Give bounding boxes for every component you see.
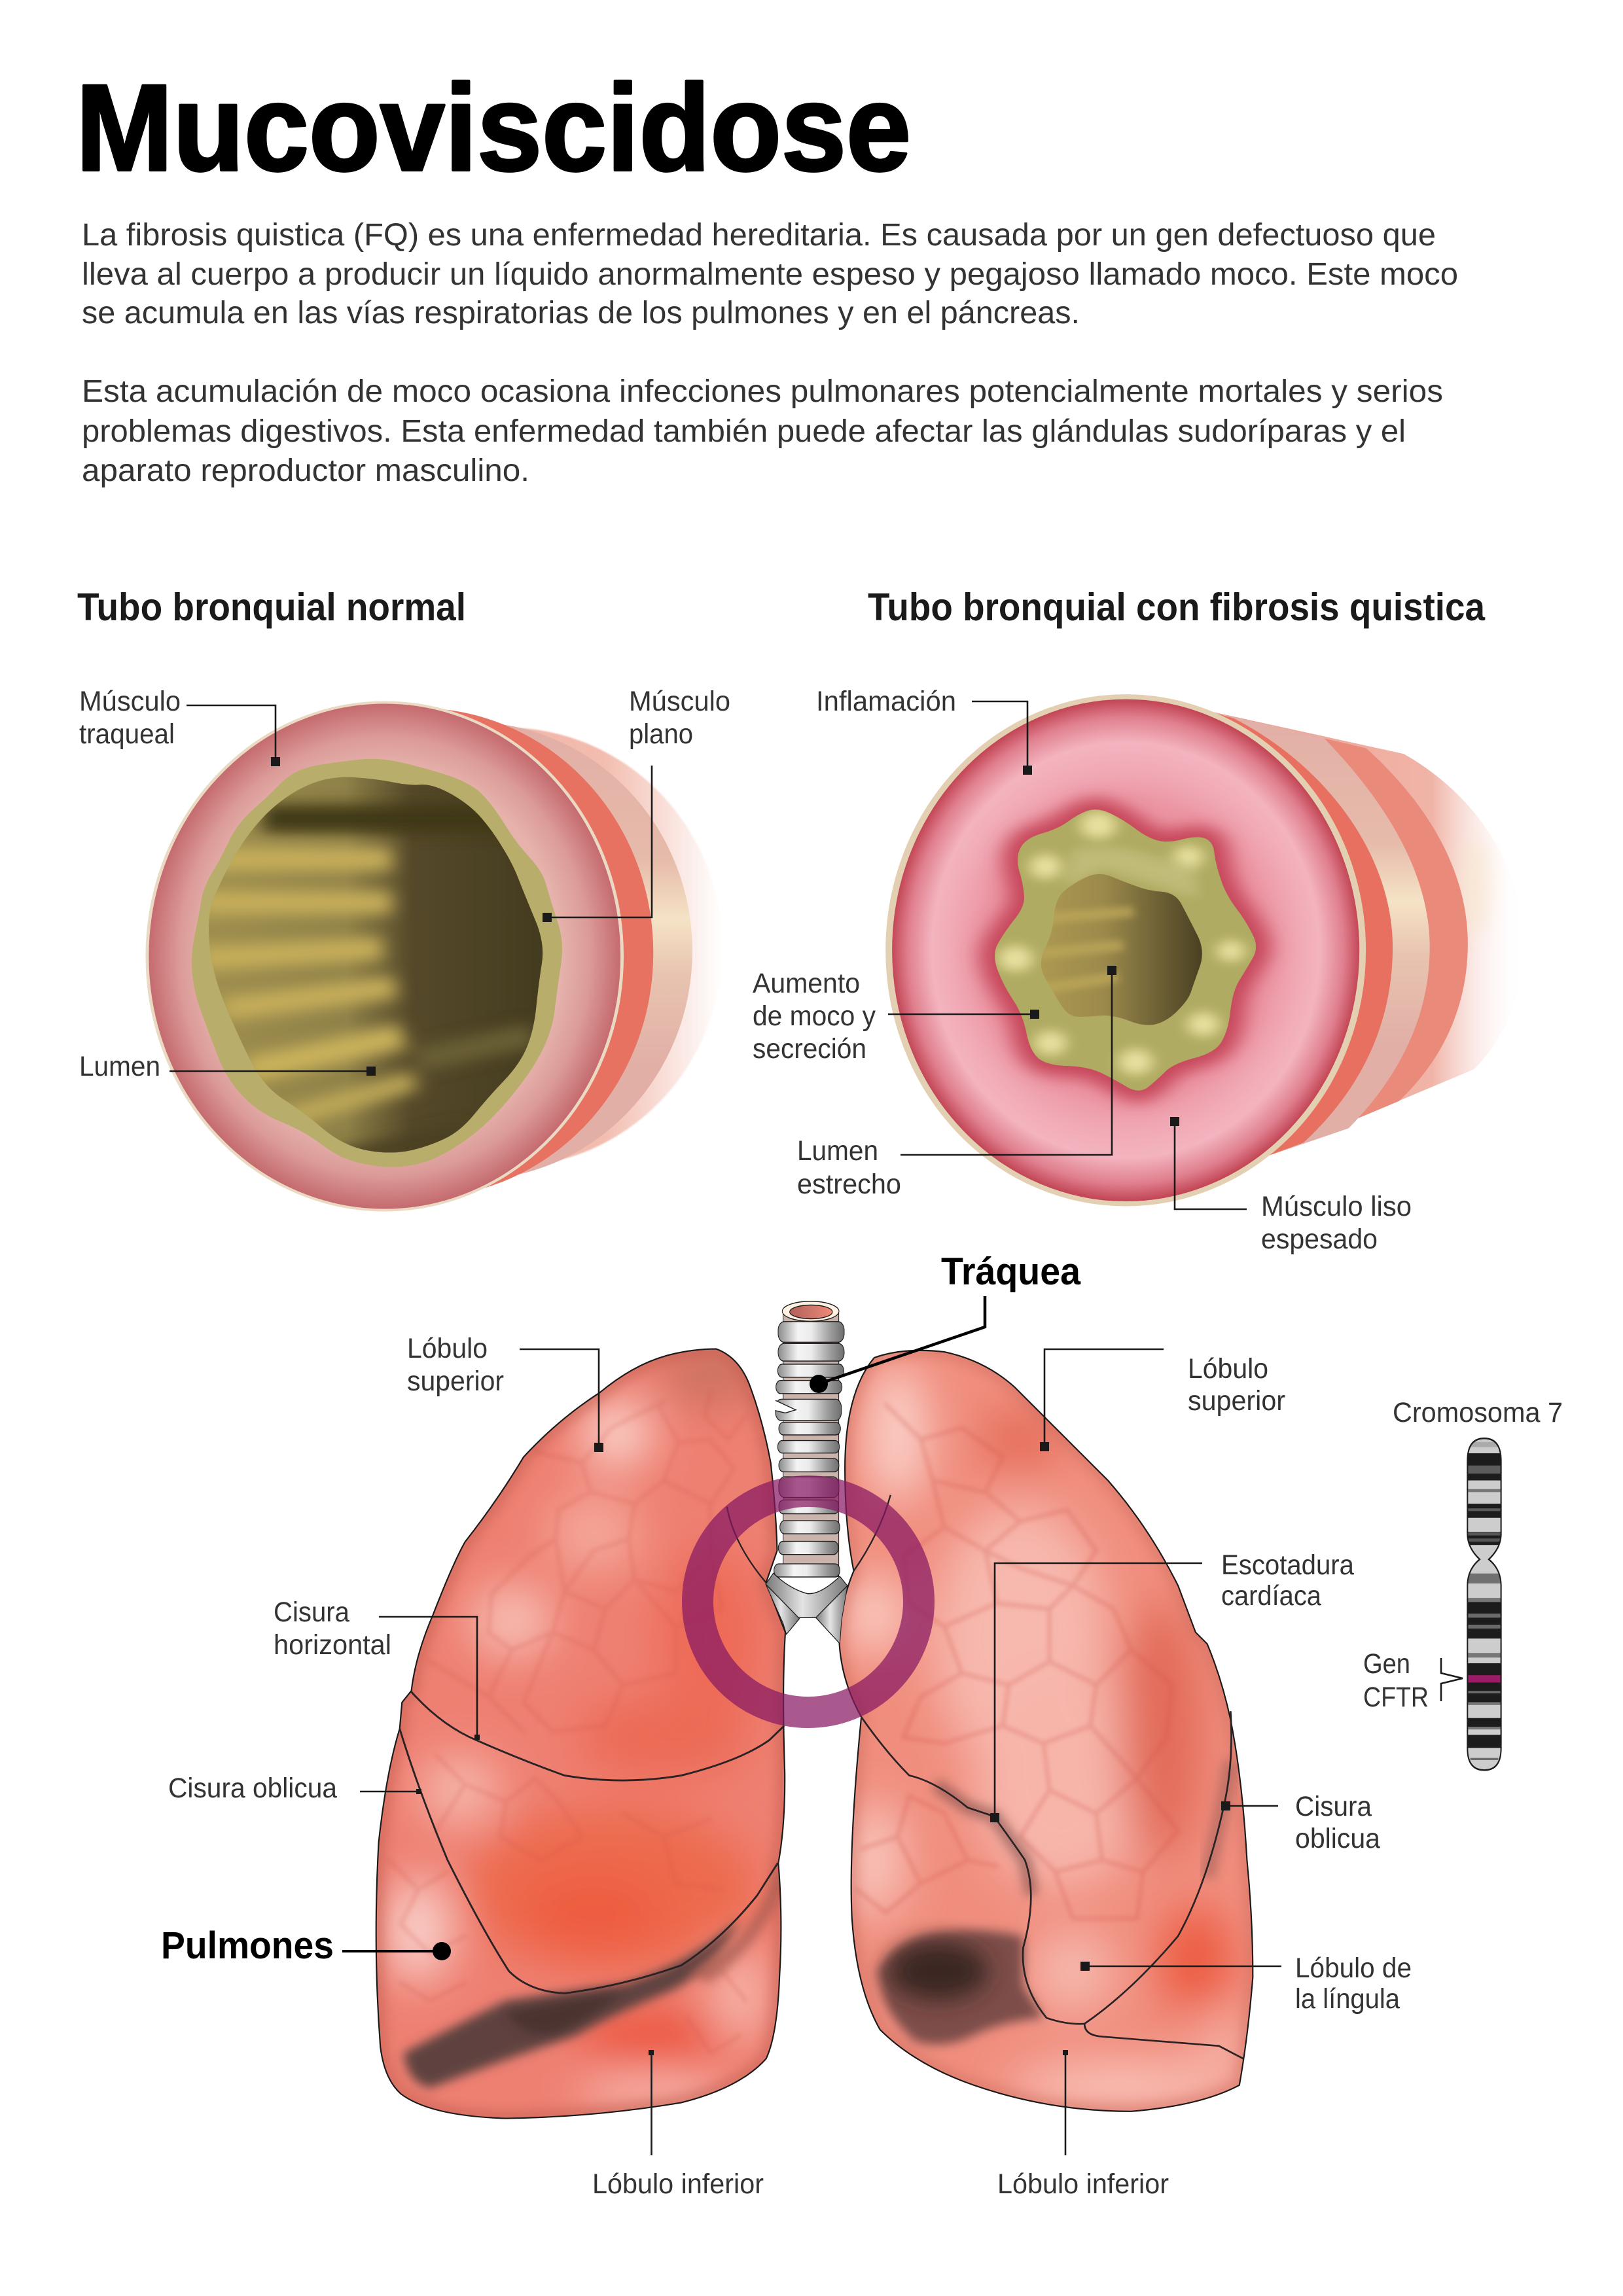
label: Escotadura cardíaca: cardíaca — [1221, 1580, 1321, 1612]
right lung — [727, 1351, 1253, 2111]
trachea illustration — [766, 1301, 847, 1644]
panel: chromosome 7 — [1363, 1397, 1563, 1773]
label: Tráquea — [810, 1250, 1081, 1393]
label: Cisura oblicua (right): oblicua — [1295, 1823, 1380, 1854]
left lung shading — [386, 1349, 766, 2108]
front face — [147, 702, 622, 1210]
label: Lóbulo de la língula: la língula — [1295, 1983, 1400, 2015]
left lung outline — [376, 1349, 785, 2119]
intro text block: problemas digestivos. Esta enfermedad también puede afectar las glándulas sudoríparas y el — [82, 414, 1406, 449]
cartilage rings — [774, 1322, 844, 1577]
tube body rings — [185, 708, 722, 1198]
label: Tráquea: Tráquea — [941, 1250, 1081, 1293]
labels: lungs — [161, 1250, 1412, 2200]
narrow lumen — [1041, 874, 1202, 1025]
right lung edge shadow — [839, 1351, 1253, 2111]
label: Músculo traqueal: traqueal — [79, 718, 175, 750]
mucus and secretion — [995, 809, 1256, 1091]
left lung vessel network — [389, 1393, 745, 2053]
mucus layer — [192, 759, 562, 1167]
label: Lóbulo inferior (left): Lóbulo inferior — [592, 2168, 764, 2200]
label: Lóbulo superior (left lung): Lóbulo — [407, 1333, 488, 1364]
label: Lóbulo inferior (left) — [592, 2050, 764, 2200]
heading: normal bronchial tube: Tubo bronquial normal — [77, 586, 466, 629]
label: Cisura oblicua (right) — [1221, 1791, 1380, 1854]
label: Aumento de moco y secreción: secreción — [753, 1033, 866, 1065]
heading: bronchial tube with cystic fibrosis: Tubo bronquial con fibrosis quistica — [868, 586, 1486, 629]
label: Músculo plano: plano — [629, 718, 693, 750]
labels: cystic fibrosis tube — [753, 686, 1412, 1255]
inflammation glow around mucus — [971, 793, 1281, 1109]
label: Lóbulo superior (right lung): superior — [1188, 1385, 1285, 1417]
intro text block: Esta acumulación de moco ocasiona infecciones pulmonares potencialmente mortales y serios — [82, 374, 1443, 409]
label: Músculo liso espesado — [1170, 1117, 1412, 1255]
label: Lóbulo superior (left lung) — [407, 1333, 603, 1452]
labels: normal tube — [79, 686, 730, 1082]
left lung — [376, 1349, 787, 2119]
right lung dark consolidation — [877, 1930, 1044, 2045]
label: Lumen: Lumen — [79, 1051, 160, 1082]
right lung outline — [839, 1351, 1253, 2111]
label: Gen CFTR: CFTR — [1363, 1682, 1429, 1713]
label: Cisura horizontal: Cisura — [274, 1597, 349, 1628]
label: Lumen estrecho: Lumen — [797, 1135, 878, 1167]
chromosome drawing — [1466, 1436, 1503, 1773]
chromosome outline — [1467, 1438, 1501, 1770]
label: Inflamación: Inflamación — [816, 686, 956, 717]
right lung shading — [845, 1364, 1248, 2102]
bifurcation — [766, 1573, 847, 1644]
intro text block: La fibrosis quistica (FQ) es una enfermedad hereditaria. Es causada por un gen defectuoso que — [82, 218, 1436, 253]
label: Cisura horizontal — [274, 1597, 480, 1740]
label: Músculo traqueal: Músculo — [79, 686, 181, 717]
label: Cisura oblicua (left): Cisura oblicua — [168, 1773, 337, 1804]
intro text block — [82, 218, 1458, 488]
label: Músculo traqueal — [79, 686, 280, 766]
left lung horizontal fissure — [412, 1692, 784, 1780]
intro text block: lleva al cuerpo a producir un líquido anormalmente espeso y pegajoso llamado moco. Este moco — [82, 257, 1458, 292]
label: Gen CFTR: Gen — [1363, 1648, 1410, 1680]
label: Aumento de moco y secreción: de moco y — [753, 1000, 876, 1032]
label: Pulmones: Pulmones — [161, 1924, 334, 1967]
label: Aumento de moco y secreción: Aumento — [753, 968, 860, 999]
left lung oblique fissure — [400, 1729, 777, 1993]
label: Gen CFTR — [1363, 1648, 1463, 1713]
label: Cisura oblicua (right): Cisura — [1295, 1791, 1372, 1822]
fissure ends at hilum — [727, 1495, 891, 1583]
left lung edge shadow — [376, 1349, 785, 2119]
trachea mouth — [782, 1301, 839, 1321]
label: Músculo liso espesado: espesado — [1261, 1224, 1378, 1255]
lingula lower fissure — [1084, 2024, 1243, 2058]
label: Lóbulo superior (right lung): Lóbulo — [1188, 1353, 1268, 1385]
front face — [889, 697, 1363, 1204]
intro text block: se acumula en las vías respiratorias de los pulmones y en el páncreas. — [82, 296, 1080, 330]
intro text block: aparato reproductor masculino. — [82, 453, 529, 488]
label: Músculo plano — [543, 686, 730, 922]
label: Cromosoma 7: Cromosoma 7 — [1393, 1397, 1563, 1428]
label: Lumen estrecho: estrecho — [797, 1169, 901, 1200]
left lung dark consolidation band — [404, 1918, 740, 2088]
label: Aumento de moco y secreción — [753, 968, 1039, 1065]
CFTR gene band — [1468, 1675, 1501, 1682]
panel: normal bronchial tube illustration — [147, 702, 722, 1210]
panel: lungs illustration — [376, 1349, 1253, 2119]
label: Cisura horizontal: horizontal — [274, 1629, 391, 1661]
label: Lóbulo de la língula — [1080, 1952, 1412, 2015]
label: Lóbulo inferior (right): Lóbulo inferior — [997, 2168, 1169, 2200]
title: Mucoviscidose — [76, 59, 911, 196]
label: Lóbulo inferior (right) — [997, 2050, 1169, 2200]
right lung fissures — [861, 1711, 1232, 2024]
label: Lóbulo superior (right lung) — [1040, 1349, 1285, 1451]
label: Lóbulo superior (left lung): superior — [407, 1366, 504, 1397]
panel: bronchial tube with cystic fibrosis illustration — [889, 697, 1524, 1204]
label: Lumen estrecho — [797, 966, 1116, 1200]
tube body bands — [1198, 709, 1524, 1156]
label: Lóbulo de la língula: Lóbulo de — [1295, 1952, 1412, 1984]
label: Músculo liso espesado: Músculo liso — [1261, 1191, 1412, 1222]
label: Lumen — [79, 1051, 376, 1082]
trachea shaft — [783, 1311, 839, 1576]
label: Escotadura cardíaca: Escotadura — [1221, 1549, 1354, 1581]
label: Pulmones — [161, 1924, 451, 1967]
label: Inflamación — [816, 686, 1032, 775]
right lung fissure shadow — [936, 1784, 1032, 1895]
lumen — [209, 777, 543, 1153]
label: Músculo plano: Músculo — [629, 686, 730, 717]
label: Escotadura cardíaca — [990, 1549, 1354, 1822]
right lung vessel network — [857, 1404, 1178, 1918]
magenta highlight ring — [698, 1491, 919, 1712]
